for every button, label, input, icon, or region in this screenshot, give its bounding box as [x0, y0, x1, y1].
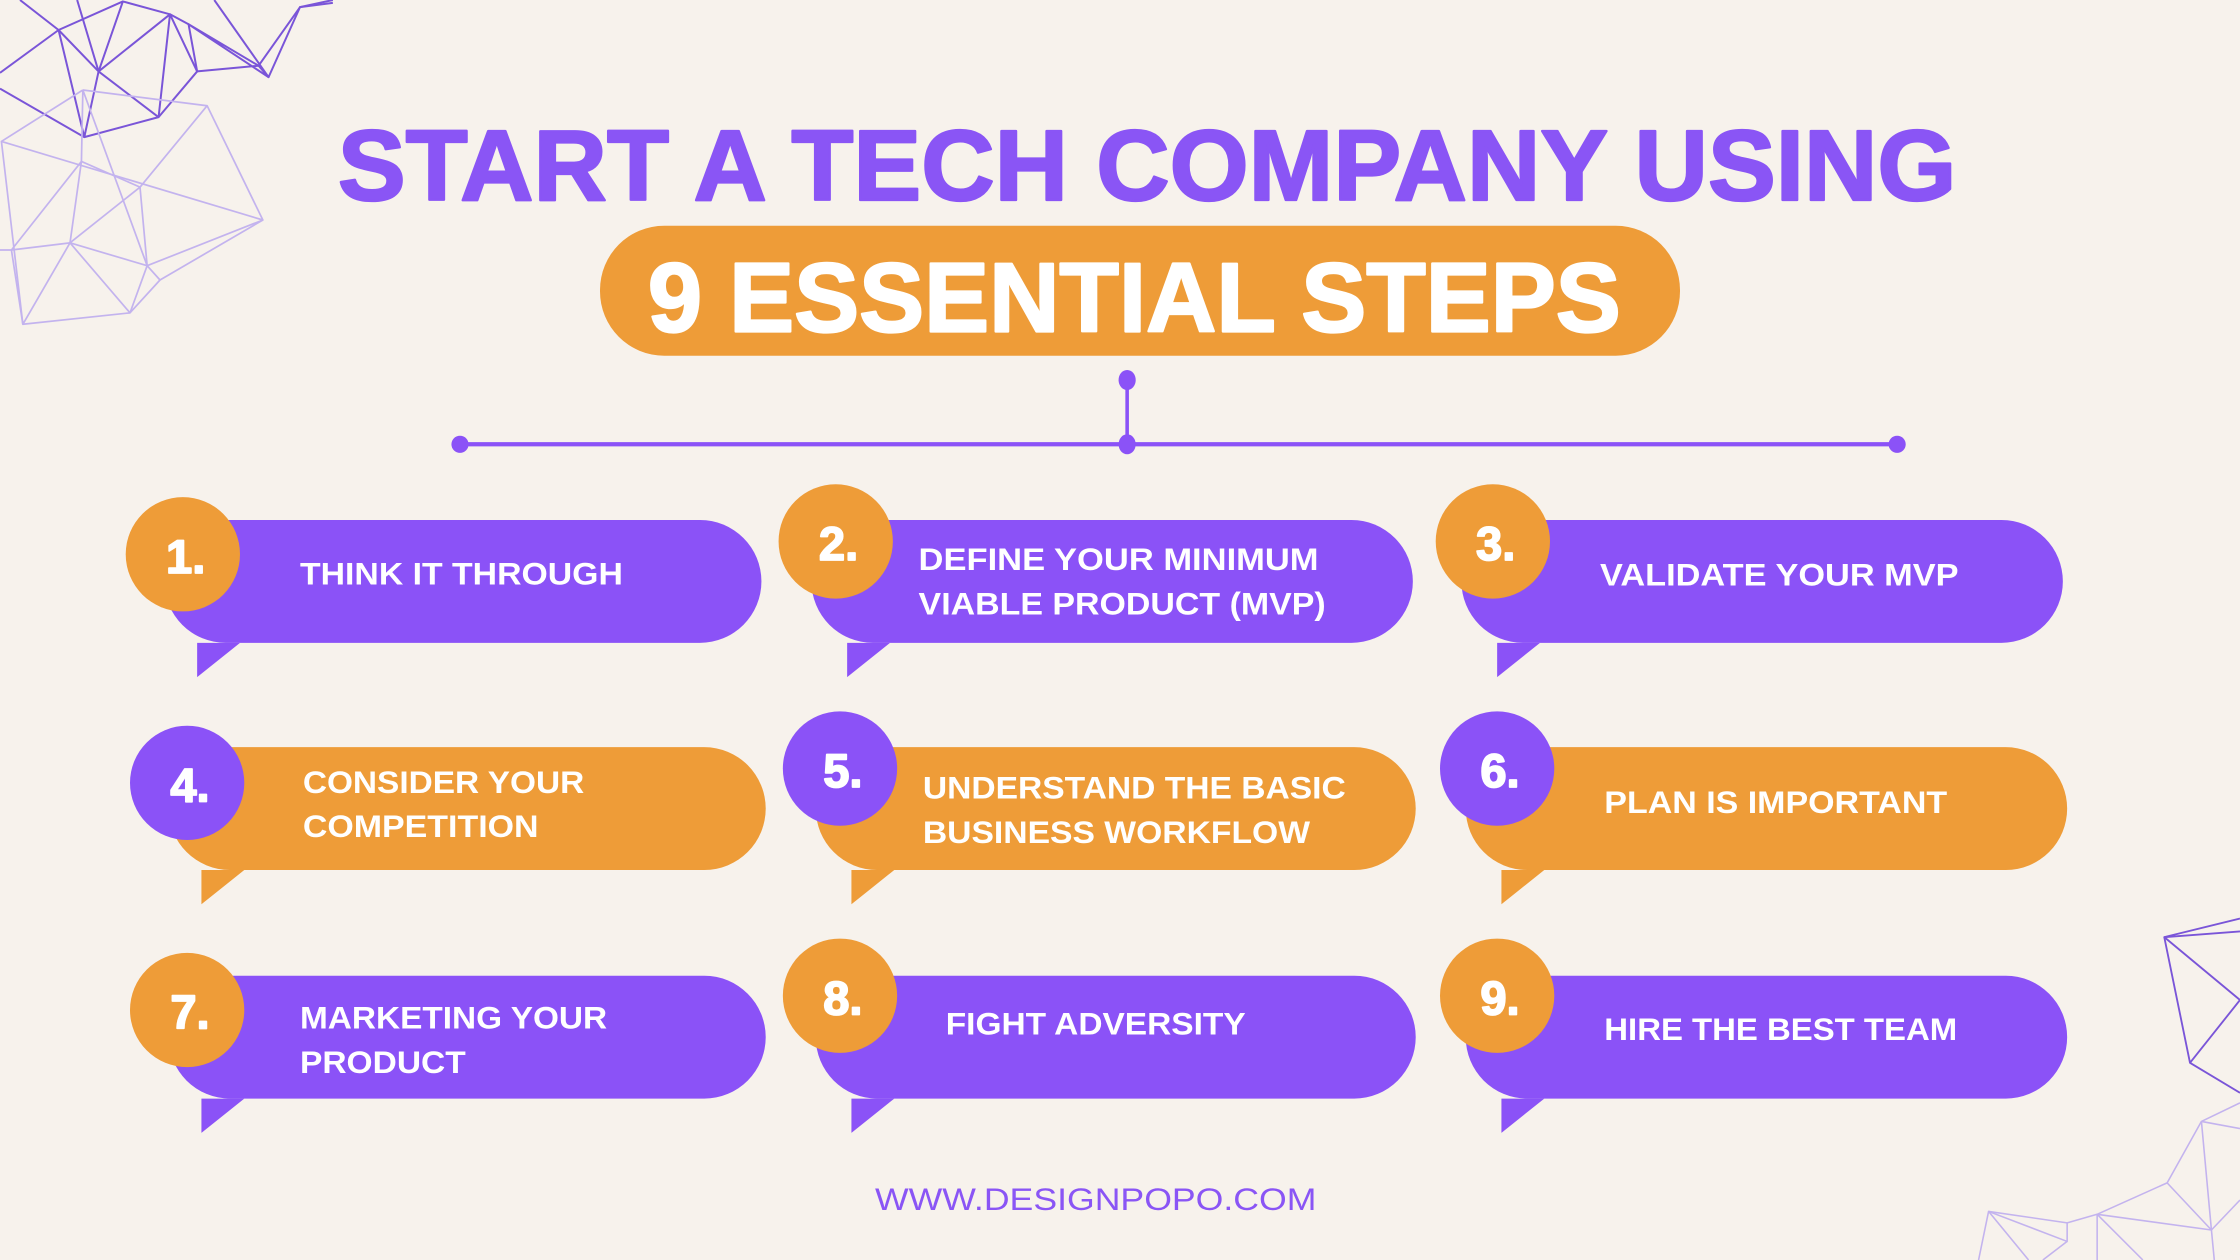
step 1: THINK IT THROUGH: [300, 556, 623, 591]
step 6: [1440, 711, 2067, 904]
step 9: 9.: [1480, 971, 1520, 1024]
step 7: [130, 953, 766, 1133]
step 1: [126, 497, 761, 677]
step 2: DEFINE YOUR MINIMUM: [919, 542, 1319, 577]
step 3: VALIDATE YOUR MVP: [1600, 558, 1959, 593]
step 8: FIGHT ADVERSITY: [946, 1006, 1246, 1041]
step 4: CONSIDER YOUR: [303, 765, 585, 800]
step 6: 6.: [1480, 744, 1520, 797]
decoration: bottom-right polygon mesh: [1979, 919, 2240, 1260]
step 4: 4.: [170, 758, 210, 811]
step 3: [1436, 484, 2063, 677]
decoration: top-left polygon mesh: [0, 0, 333, 324]
step 2: [779, 484, 1413, 677]
step 5: 5.: [823, 744, 863, 797]
title: START A TECH COMPANY USING: [338, 110, 1956, 222]
step 9: HIRE THE BEST TEAM: [1604, 1012, 1957, 1047]
step 8: 8.: [823, 971, 863, 1024]
step 6: PLAN IS IMPORTANT: [1604, 785, 1947, 820]
step 3: 3.: [1476, 517, 1515, 570]
step 5: [783, 711, 1416, 904]
step 7: 7.: [170, 986, 210, 1039]
step 5: UNDERSTAND THE BASIC: [923, 771, 1346, 806]
footer url: WWW.DESIGNPOPO.COM: [875, 1182, 1316, 1217]
step 9: [1440, 939, 2067, 1133]
step 2: VIABLE PRODUCT (MVP): [919, 586, 1326, 621]
step 7: MARKETING YOUR: [300, 1001, 607, 1036]
subtitle pill: 9 ESSENTIAL STEPS: [648, 242, 1621, 352]
step 1: 1.: [166, 530, 205, 583]
step 5: BUSINESS WORKFLOW: [923, 815, 1310, 850]
step 4: [130, 726, 766, 904]
step 8: [783, 939, 1416, 1133]
step 2: 2.: [819, 517, 858, 570]
connector lines: [451, 370, 1906, 454]
step 7: PRODUCT: [300, 1045, 466, 1080]
step 4: COMPETITION: [303, 809, 539, 844]
